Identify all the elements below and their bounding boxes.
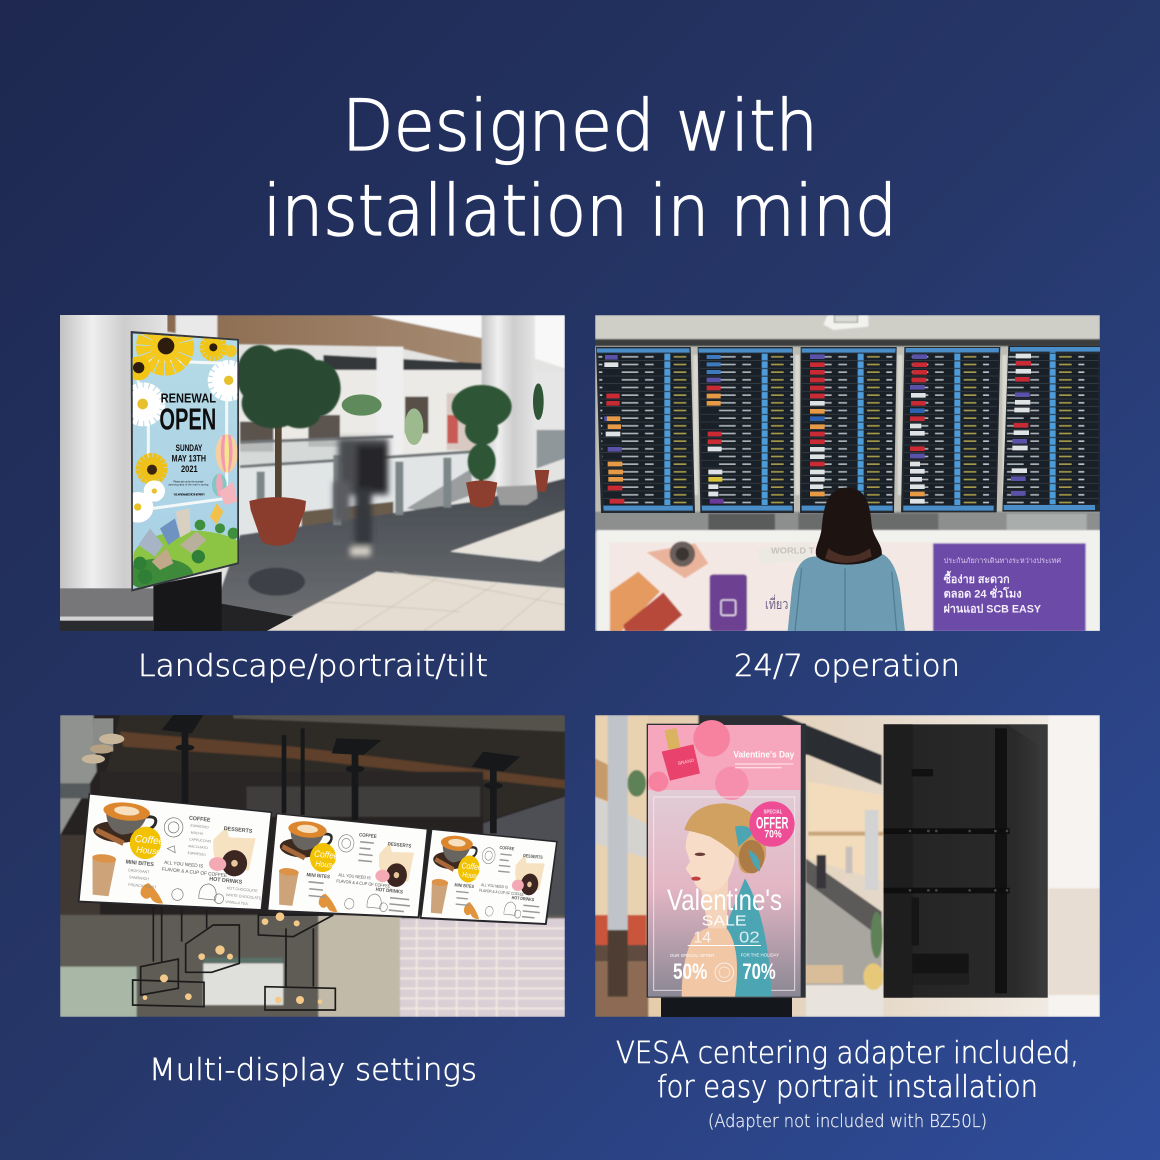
poster text — [159, 390, 216, 496]
advertising lightbox — [597, 530, 1100, 631]
display 1: coffee menu: SANDWICH — [129, 875, 149, 881]
poster text: Please join us for the renewal — [173, 480, 204, 483]
display 1: coffee menu — [78, 793, 272, 914]
display 1: coffee menu: ALL YOU NEED IS — [164, 860, 204, 870]
display 1: coffee menu: WHITE CHOCOLATE — [226, 893, 262, 901]
display 1: coffee menu: MACCHIATO — [188, 844, 208, 850]
stand and floor mat — [150, 572, 293, 631]
board 2 — [698, 347, 794, 513]
advertisement text — [765, 546, 1061, 615]
mall background — [60, 315, 565, 631]
left column — [60, 315, 167, 631]
display 1: coffee menu: FLAVOR & A CUP OF COFFEE — [161, 866, 227, 879]
poster headline and discounts: OUR SPECIAL OFFER — [670, 953, 715, 958]
display 1: coffee menu: HOT DRINKS — [209, 876, 243, 886]
airport background — [595, 315, 1100, 631]
mounting rails — [884, 828, 1010, 893]
panel: multi-display cafe photo — [60, 715, 565, 1017]
display 2: coffee menu: MINI BITES — [306, 872, 330, 880]
miniature town — [133, 508, 238, 588]
poster text: 2021 — [181, 464, 198, 474]
display 1: coffee menu: DESSERTS — [223, 826, 253, 835]
display 1: coffee menu: House — [136, 844, 162, 857]
hot air balloons — [210, 434, 238, 524]
title: installation in mind — [263, 170, 897, 252]
flight information boards — [596, 346, 1100, 513]
front portrait display with Valentine's poster — [647, 720, 806, 1017]
display 3: coffee menu: ALL YOU NEED IS — [481, 883, 509, 890]
display 3: coffee menu: MINI BITES — [454, 882, 475, 889]
pink perfume banner: BRAND — [678, 758, 695, 766]
display 3: coffee menu: HOT DRINKS — [511, 895, 535, 902]
display 2: coffee menu: DESSERTS — [387, 841, 412, 849]
display 3: coffee menu: COFFEE — [499, 845, 515, 852]
board 1 — [596, 347, 695, 513]
woman portrait — [682, 803, 772, 997]
display 2: coffee menu: COFFEE — [359, 832, 377, 839]
rear view of display with VESA adapter — [884, 724, 1048, 998]
display 1: coffee menu: MOCHA — [191, 831, 204, 836]
pink perfume banner — [648, 720, 801, 800]
display 2: coffee menu: ALL YOU NEED IS — [338, 872, 371, 880]
poster text: MAY 13TH — [172, 453, 206, 463]
panel: VESA adapter mall photo — [595, 715, 1100, 1017]
daisies — [132, 360, 238, 523]
display 1: coffee menu: FRENCH TOAST — [128, 883, 157, 890]
panel: 24/7 operation airport photo — [595, 315, 1100, 631]
display 2: coffee menu: Coffee — [314, 848, 339, 861]
poster text: opening party of the mall in spring — [168, 484, 209, 487]
advertisement text: ตลอด 24 ชั่วโมง — [944, 586, 1022, 601]
title — [263, 85, 897, 252]
board 5 — [1002, 346, 1100, 512]
woman with long dark hair and denim jacket — [788, 488, 905, 631]
display 1: coffee menu: COFFEE — [189, 816, 211, 824]
display 2: coffee menu: FLAVOR & A CUP OF COFFEE — [336, 878, 391, 889]
display 1: coffee menu: VANILLA TEA — [225, 900, 249, 906]
display 2: coffee menu: HOT DRINKS — [375, 887, 403, 895]
poster headline and discounts: 14 — [693, 929, 711, 946]
caption: VESA centering adapter: VESA centering adapter included, — [616, 1036, 1079, 1071]
advertisement text: ซื้อง่าย สะดวก — [944, 570, 1010, 586]
caption: VESA centering adapter — [616, 1036, 1079, 1105]
poster text: YOU ARE INVITED TO THE PARTY — [173, 492, 205, 496]
poster headline and discounts: FOR THE HOLIDAY — [741, 953, 779, 958]
advertisement text: WORLD T — [771, 546, 815, 556]
display 3: coffee menu: Coffee — [461, 861, 483, 872]
caption: landscape/portrait/tilt: Landscape/portrait/tilt — [138, 649, 488, 684]
display 1: coffee menu: HOT CHOCOLATE — [227, 886, 258, 893]
poster text: SUNDAY — [176, 443, 203, 453]
portrait display — [130, 331, 239, 592]
special offer badge: OFFER — [756, 813, 788, 832]
display 2: coffee menu — [267, 813, 428, 919]
sunflowers — [127, 326, 237, 482]
advertisement text: ประกันภัยการเดินทางระหว่างประเทศ — [944, 556, 1061, 565]
display 3: coffee menu: FLAVOR & A CUP OF COFFEE — [479, 888, 525, 897]
panel: landscape/portrait/tilt mall photo — [60, 315, 565, 631]
display 1: coffee menu: ESPRESSO — [187, 851, 206, 857]
special offer badge — [749, 801, 795, 847]
poster headline and discounts: SALE — [702, 914, 747, 930]
display 1: coffee menu: Coffee — [134, 834, 165, 848]
ceiling mounts and poles — [162, 715, 520, 833]
poster text: RENEWAL — [161, 390, 216, 405]
display 1: coffee menu: CAPPUCCINO — [189, 837, 212, 844]
poster headline and discounts — [667, 884, 782, 984]
mall background — [595, 715, 1100, 1017]
pink perfume banner: Valentine's Day — [733, 749, 794, 759]
footnote: (Adapter not included with BZ50L) — [708, 1111, 987, 1132]
caption: multi-display settings: Multi-display settings — [149, 1053, 477, 1088]
poster headline and discounts: 50% — [673, 959, 707, 984]
display 1: coffee menu: CROISSANT — [128, 868, 150, 874]
advertisement text: ผ่านแอป SCB EASY — [944, 602, 1041, 615]
caption: VESA centering adapter: for easy portrait installation — [657, 1070, 1038, 1105]
display 1: coffee menu: ESPRESSO — [190, 824, 209, 830]
motion-blurred shopper — [333, 438, 388, 556]
poster text: OPEN — [159, 402, 216, 436]
poster headline and discounts: Valentine's — [667, 884, 782, 917]
pendant lamps — [133, 907, 335, 1010]
poster headline and discounts: 02 — [739, 929, 760, 946]
display 3: coffee menu: House — [462, 871, 480, 881]
display 3: coffee menu — [420, 828, 558, 925]
special offer badge: 70% — [764, 828, 782, 840]
display 2: coffee menu: House — [315, 859, 336, 870]
board 3 — [800, 347, 897, 513]
title: Designed with — [342, 85, 818, 167]
caption: 24/7 operation: 24/7 operation — [734, 649, 960, 684]
advertisement text: เที่ยว — [765, 595, 788, 612]
board 4 — [901, 347, 1000, 512]
cafe ceiling and walls — [60, 715, 565, 1017]
tree and planters — [237, 345, 549, 546]
special offer badge: SPECIAL — [764, 809, 783, 815]
display 3: coffee menu: DESSERTS — [523, 853, 543, 860]
poster headline and discounts: 70% — [742, 959, 776, 984]
display 1: coffee menu: MINI BITES — [125, 859, 155, 868]
ceiling spotlights — [82, 718, 124, 764]
